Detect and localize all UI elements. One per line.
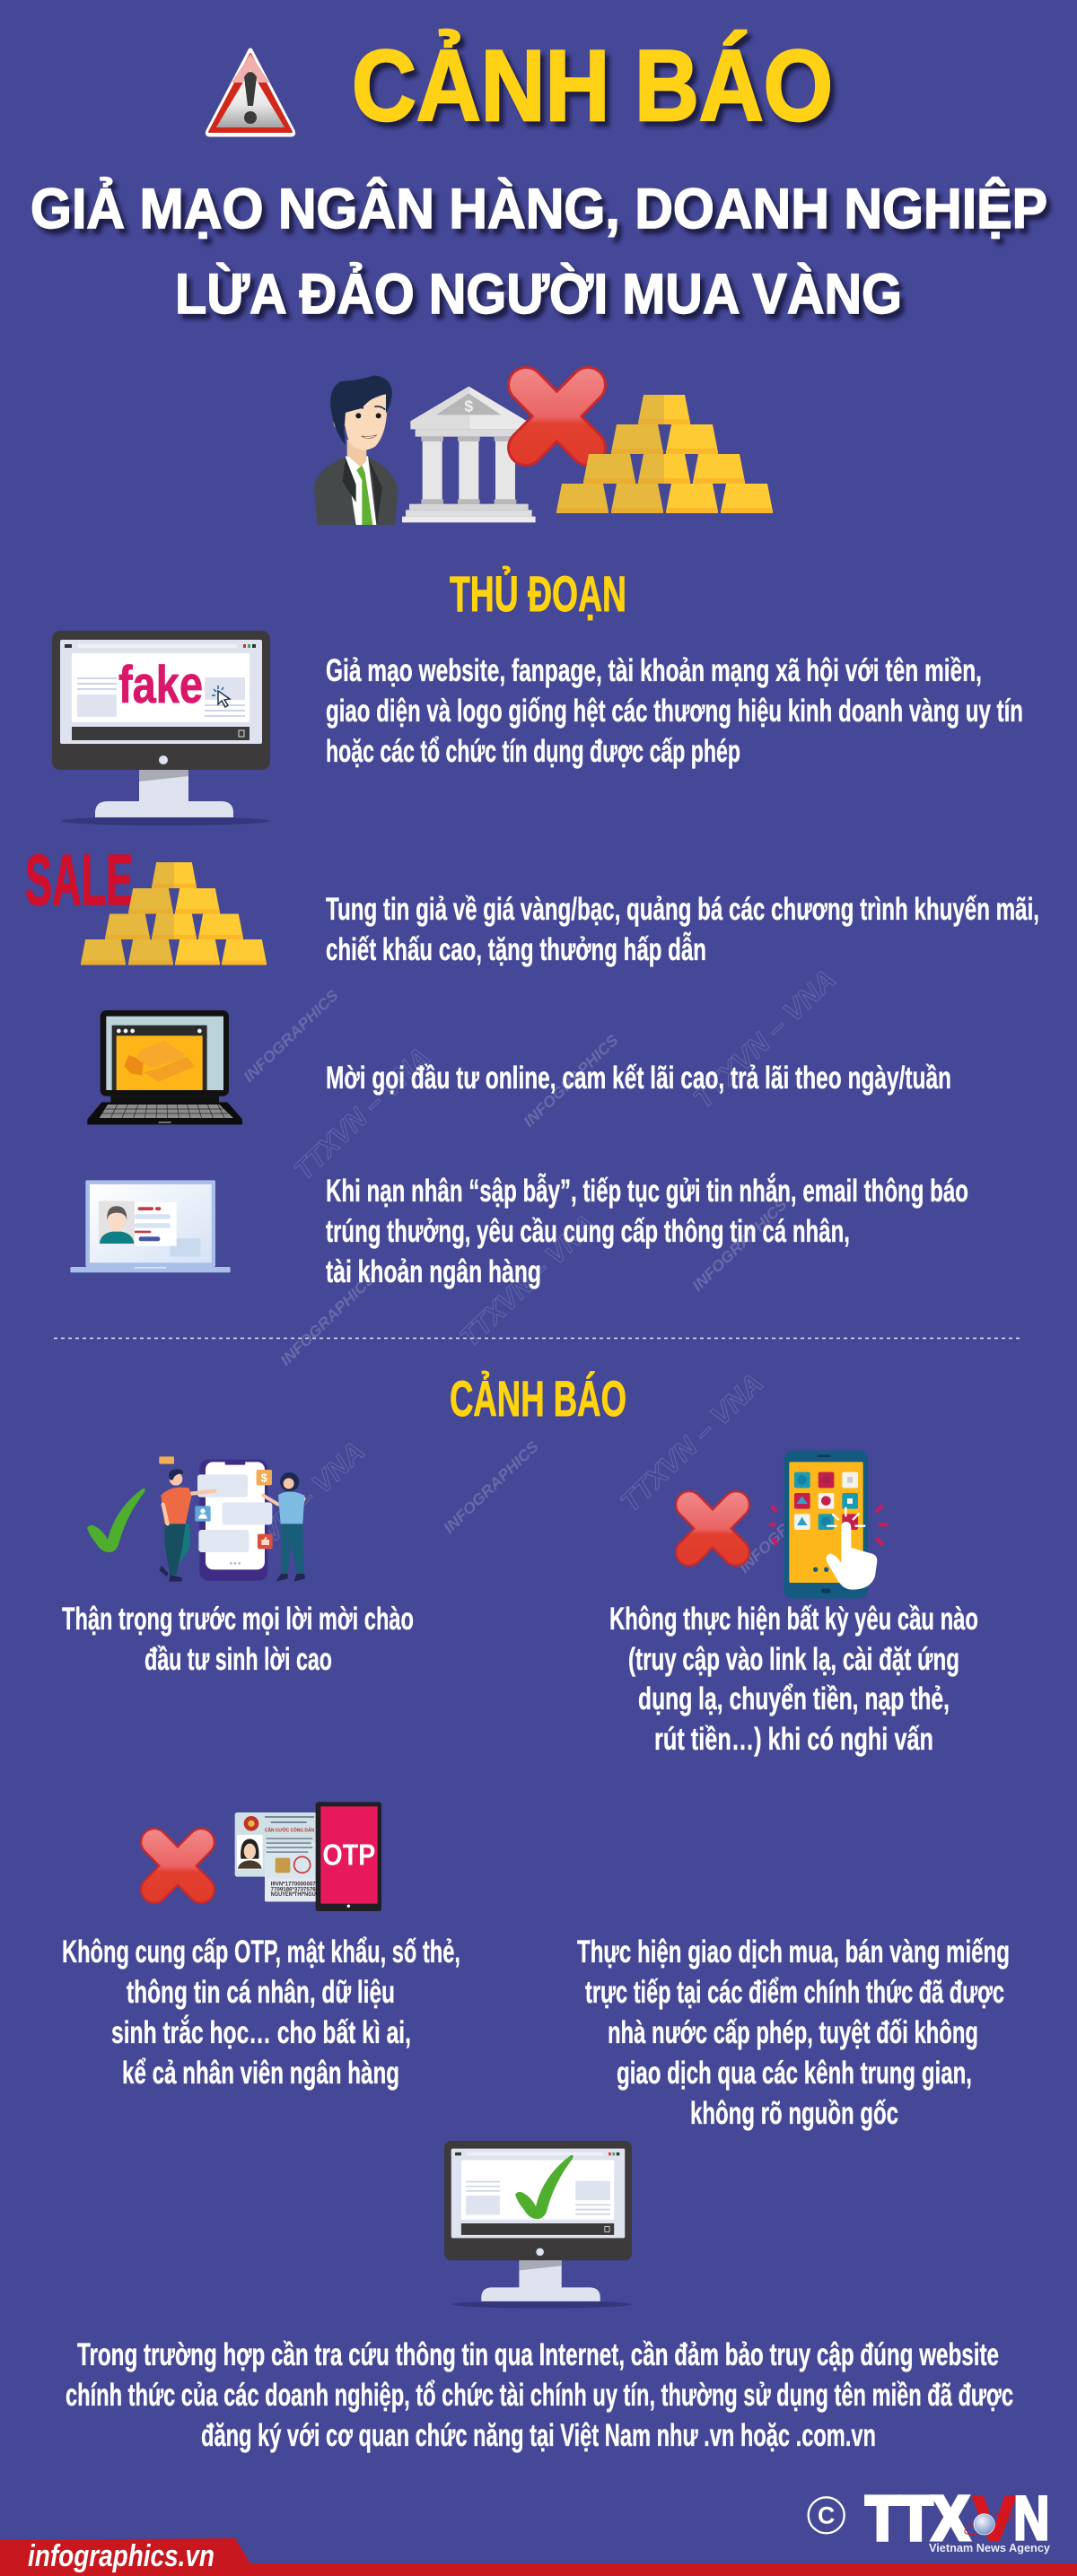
icon: bank: $ xyxy=(464,397,473,415)
icon: bank xyxy=(402,387,536,522)
footer band xyxy=(0,2538,1077,2576)
text: thủ đoạn 4 xyxy=(326,1173,968,1289)
icon: OTP tablet xyxy=(316,1802,381,1911)
text: thủ đoạn 4: tài khoản ngân hàng xyxy=(326,1254,541,1289)
text: cảnh báo 2: dụng lạ, chuyển tiền, nạp thẻ, xyxy=(638,1681,950,1716)
icon: ID card: NGUYEN*THI*NGU xyxy=(271,1891,316,1898)
text: closing advice xyxy=(66,2337,1013,2453)
text: cảnh báo 4: không rõ nguồn gốc xyxy=(690,2096,898,2131)
icon: verified website monitor xyxy=(444,2141,632,2309)
icon: laptop with personal data xyxy=(70,1180,231,1272)
watermarks: INFOGRAPHICS xyxy=(689,1195,791,1295)
subtitle: LỪA ĐẢO NGƯỜI MUA VÀNG xyxy=(175,262,902,326)
logo: TTXVN: C xyxy=(818,2502,835,2529)
text: cảnh báo 3: kể cả nhân viên ngân hàng xyxy=(122,2056,399,2091)
watermarks: TTXVN – VNA xyxy=(454,1209,602,1353)
text: cảnh báo 3: thông tin cá nhân, dữ liệu xyxy=(127,1975,395,2010)
icon: warning triangle xyxy=(207,50,293,135)
logo: TTXVN: TTX xyxy=(866,2484,969,2553)
text: cảnh báo 3 xyxy=(62,1934,460,2091)
watermarks: INFOGRAPHICS xyxy=(521,1031,622,1131)
icon: ID card xyxy=(235,1812,317,1901)
watermarks: INFOGRAPHICS xyxy=(441,1437,542,1537)
text: thủ đoạn 2 xyxy=(326,892,1039,967)
text: thủ đoạn 2: chiết khấu cao, tặng thưởng hấp dẫn xyxy=(326,931,706,967)
icon: people with phone: $ xyxy=(261,1471,267,1484)
watermarks: TTXVN – VNA xyxy=(615,1367,769,1518)
icon: fake website monitor xyxy=(52,631,270,825)
text: cảnh báo 1: đầu tư sinh lời cao xyxy=(144,1642,332,1677)
footer band: infographics.vn xyxy=(28,2539,215,2573)
icon: OTP tablet: OTP xyxy=(322,1838,375,1872)
icon: phone with hand xyxy=(771,1451,887,1599)
icon: green check xyxy=(87,1489,145,1552)
text: cảnh báo 1 xyxy=(62,1602,414,1677)
text: cảnh báo 2 xyxy=(609,1602,978,1757)
text: thủ đoạn 4: trúng thưởng, yêu cầu cung cấp thông tin cá nhân, xyxy=(326,1214,850,1249)
text: cảnh báo 2: rút tiền…) khi có nghi vấn xyxy=(654,1722,933,1757)
icon: red cross 3 xyxy=(154,1842,201,1890)
icon: fake website monitor: fake xyxy=(118,656,203,714)
watermarks: INFOGRAPHICS xyxy=(736,1477,837,1576)
watermarks xyxy=(216,964,842,1586)
text: cảnh báo 4 xyxy=(577,1934,1010,2131)
logo: TTXVN: N xyxy=(1013,2484,1049,2553)
text: cảnh báo 3: Không cung cấp OTP, mật khẩu, số thẻ, xyxy=(62,1934,460,1969)
watermarks: TTXVN – VNA xyxy=(216,1436,371,1586)
icon: red cross xyxy=(526,385,588,448)
logo: TTXVN: Vietnam News Agency xyxy=(929,2542,1050,2554)
watermarks: TTXVN – VNA xyxy=(687,964,842,1114)
icon: ID card: I9VN*1770000007 xyxy=(271,1882,316,1888)
watermarks: INFOGRAPHICS xyxy=(277,1270,379,1369)
title: CẢNH BÁO xyxy=(352,30,833,142)
text: thủ đoạn 1 xyxy=(326,653,1023,769)
icon: ID card: CĂN CƯỚC CÔNG DÂN xyxy=(265,1826,314,1833)
icon: ID card: 7709186*3737576 xyxy=(271,1886,316,1892)
watermarks: INFOGRAPHICS xyxy=(241,986,342,1086)
text: cảnh báo 3: sinh trắc học… cho bất kì ai, xyxy=(111,2014,411,2050)
icon: red cross 2 xyxy=(689,1505,736,1552)
icon: sale label: SALE xyxy=(25,840,133,920)
icon: businessman xyxy=(314,375,398,525)
text: cảnh báo 1: Thận trọng trước mọi lời mời chào xyxy=(62,1602,414,1637)
heading: CẢNH BÁO: CẢNH BÁO xyxy=(450,1370,626,1427)
logo: TTXVN xyxy=(809,2484,1050,2554)
icon: people with phone xyxy=(159,1456,305,1582)
icon: gold stack xyxy=(556,395,773,513)
icon: gold stack 2 xyxy=(81,862,267,965)
icon: laptop with gold xyxy=(87,1010,242,1124)
text: thủ đoạn 1: hoặc các tổ chức tín dụng được cấp phép xyxy=(326,734,740,769)
heading: THỦ ĐOẠN: THỦ ĐOẠN xyxy=(450,565,626,622)
logo: TTXVN: V xyxy=(973,2484,1016,2553)
subtitle xyxy=(31,177,1047,326)
watermarks: TTXVN – VNA xyxy=(288,1042,436,1186)
